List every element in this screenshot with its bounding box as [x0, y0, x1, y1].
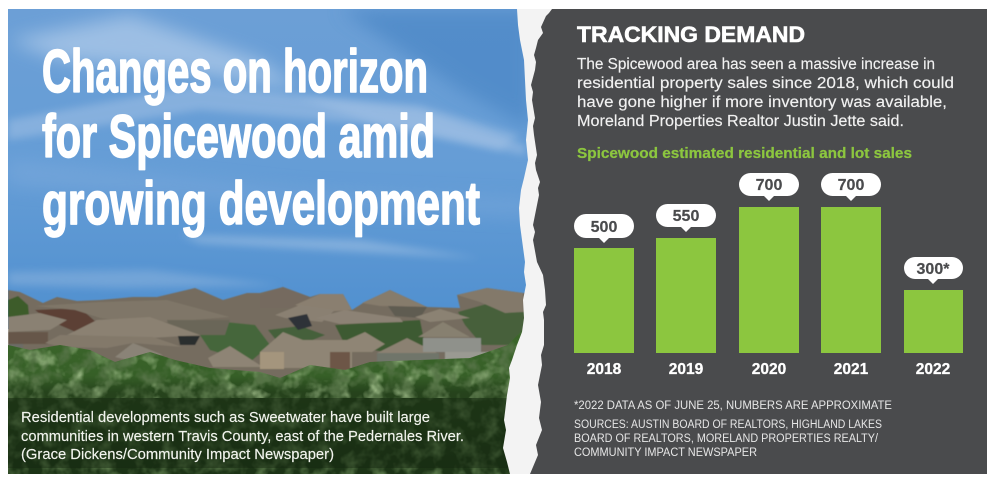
torn paper edge: [503, 9, 552, 474]
bar: 2018: [574, 214, 634, 378]
headline: growing development: [42, 170, 480, 237]
photo caption: communities in western Travis County, east of the Pedernales River.: [21, 428, 464, 445]
intro text: have gone higher if more inventory was available,: [577, 94, 947, 111]
panel: photo of Spicewood neighbourhood: [8, 9, 532, 474]
bar: 2018: 2018: [587, 361, 622, 378]
intro text: [577, 56, 954, 130]
roofs right group: [260, 287, 310, 308]
bar: 2022: 300*: [917, 261, 950, 278]
bar: 2019: 550: [673, 208, 699, 225]
trees: [8, 330, 522, 474]
bar: 2018: 500: [591, 219, 617, 236]
headline: Changes on horizon: [42, 38, 428, 105]
bar: 2020: 700: [756, 177, 782, 194]
panel: dark chart background: [520, 9, 987, 474]
sources: SOURCES: AUSTIN BOARD OF REALTORS, HIGHLAND LAKES: [574, 419, 882, 431]
chart title: Spicewood estimated residential and lot sales: [577, 145, 912, 162]
footnote: *2022 DATA AS OF JUNE 25, NUMBERS ARE APPROXIMATE: [574, 400, 892, 412]
headline: for Spicewood amid: [42, 103, 435, 170]
mid-ground trees: [8, 296, 30, 318]
intro text: The Spicewood area has seen a massive increase in: [577, 56, 935, 73]
bar: 2020: [739, 173, 799, 378]
sources: COMMUNITY IMPACT NEWSPAPER: [574, 447, 757, 459]
photo caption: (Grace Dickens/Community Impact Newspaper): [21, 446, 334, 463]
headline: [42, 38, 480, 237]
houses: [8, 286, 524, 378]
intro text: Moreland Properties Realtor Justin Jette said.: [577, 113, 904, 130]
bar chart: [574, 173, 963, 378]
roofs left group: [36, 308, 94, 332]
photo caption: Residential developments such as Sweetwater have built large: [21, 409, 430, 426]
bar: 2021: 2021: [834, 361, 869, 378]
bar: 2019: 2019: [669, 361, 704, 378]
intro text: residential property sales since 2018, which could: [577, 75, 954, 92]
photo caption: [21, 409, 464, 463]
bar: 2022: [904, 257, 963, 378]
bar: 2022: 2022: [916, 361, 950, 378]
bar: 2020: 2020: [752, 361, 786, 378]
sources: [574, 419, 882, 459]
sky: [8, 9, 532, 329]
bar: 2019: [656, 204, 716, 378]
sources: BOARD OF REALTORS, MORELAND PROPERTIES REALTY/: [574, 433, 879, 445]
caption band: [8, 398, 532, 468]
bar: 2021: [821, 173, 881, 378]
bar: 2021: 700: [838, 177, 864, 194]
heading: tracking demand: TRACKING DEMAND: [577, 22, 805, 47]
